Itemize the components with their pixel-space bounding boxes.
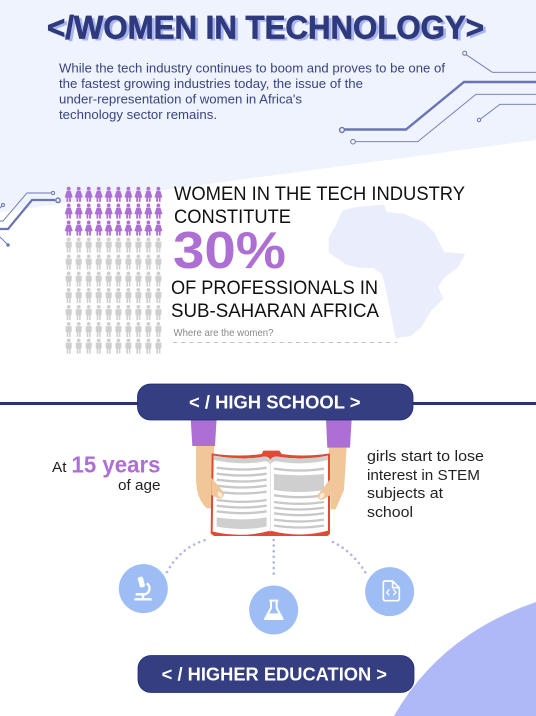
open pages: [213, 456, 328, 535]
statistic text block: [171, 184, 465, 322]
intro text block: technology sector remains.: [59, 108, 217, 122]
heading pill: high school: [138, 384, 413, 420]
heading pill: higher education: < / HIGHER EDUCATION >: [162, 664, 387, 684]
icon: microscope: [119, 564, 168, 613]
left thumb: [211, 478, 224, 499]
right thumb: [318, 479, 330, 500]
caption: where are the women: Where are the women?: [174, 327, 274, 339]
intro text block: the fastest growing industries today, the issue of the: [59, 77, 363, 91]
panel: header background: [0, 0, 536, 212]
right sleeve: [326, 419, 352, 448]
icon: code file: [365, 567, 414, 616]
icon: circuit lines left: [0, 191, 60, 246]
heading pill: high school: < / HIGH SCHOOL >: [189, 392, 360, 412]
icon: map of Africa: [330, 206, 463, 337]
statistic text block: CONSTITUTE: [174, 207, 291, 228]
right arm: [329, 447, 347, 509]
callout: girls lose interest in STEM: school: [367, 504, 413, 521]
callout: girls lose interest in STEM: interest in STEM: [367, 467, 480, 484]
panel: bottom corner shape: [394, 602, 536, 716]
big number: 30%: 30%: [173, 222, 286, 280]
callout: at 15 years of age: 15 years: [72, 451, 160, 477]
callout: girls lose interest in STEM: [367, 448, 484, 521]
book cover: [211, 451, 330, 536]
dotted connectors: [167, 540, 368, 579]
statistic text block: SUB-SAHARAN AFRICA: [171, 301, 379, 322]
intro text block: While the tech industry continues to boom and proves to be one of: [59, 61, 446, 75]
title: </WOMEN IN TECHNOLOGY>: [50, 12, 487, 48]
book illustration with hands: [191, 418, 352, 536]
left sleeve: [191, 418, 217, 446]
icon: circuit lines top right: [340, 51, 536, 144]
chart: pictogram of 100 people, 30 highlighted: [65, 187, 162, 354]
callout: girls lose interest in STEM: subjects at: [367, 485, 444, 502]
callout: at 15 years of age: [52, 451, 160, 494]
heading pill: higher education: [138, 656, 414, 692]
statistic text block: WOMEN IN THE TECH INDUSTRY: [174, 184, 465, 205]
intro text block: under-representation of women in Africa's: [59, 92, 302, 106]
left arm: [196, 446, 214, 508]
callout: girls lose interest in STEM: girls start to lose: [367, 448, 484, 465]
callout: at 15 years of age: At: [52, 459, 67, 476]
statistic text block: OF PROFESSIONALS IN: [171, 278, 378, 299]
title: </WOMEN IN TECHNOLOGY>: [47, 9, 484, 45]
icon: flask: [249, 585, 298, 634]
callout: at 15 years of age: of age: [118, 477, 160, 494]
intro text block: [59, 61, 446, 122]
